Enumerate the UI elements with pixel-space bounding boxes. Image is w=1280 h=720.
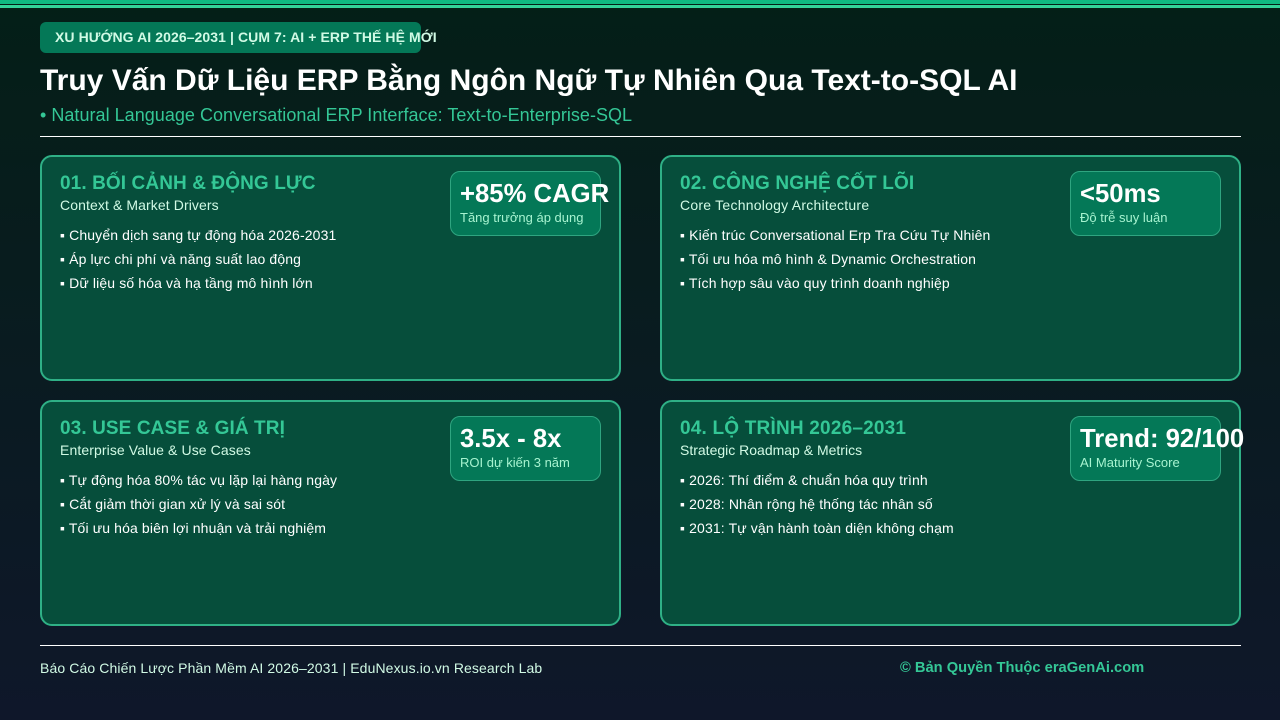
stat box: growth: +85% CAGR bbox=[460, 180, 609, 208]
bullet list: ▪ Cắt giảm thời gian xử lý và sai sót bbox=[60, 496, 285, 512]
panel subheading: Strategic Roadmap & Metrics bbox=[680, 442, 862, 458]
bullet list: ▪ Áp lực chi phí và năng suất lao động bbox=[60, 251, 301, 267]
stat box: latency: Độ trễ suy luận bbox=[1080, 210, 1167, 225]
bullet list: ▪ Chuyển dịch sang tự động hóa 2026-2031 bbox=[60, 227, 336, 243]
bullet list: ▪ 2028: Nhân rộng hệ thống tác nhân số bbox=[680, 496, 933, 512]
stat box: ROI: 3.5x - 8x bbox=[460, 425, 561, 453]
panel: context and market drivers bbox=[40, 155, 621, 381]
panel heading: 02. CÔNG NGHỆ CỐT LÕI bbox=[680, 173, 914, 194]
stat box: maturity score bbox=[1070, 416, 1221, 481]
panel: core technology bbox=[660, 155, 1241, 381]
bullet list: ▪ Tự động hóa 80% tác vụ lặp lại hàng ngày bbox=[60, 472, 337, 488]
bullet list: ▪ Tối ưu hóa biên lợi nhuận và trải nghiệm bbox=[60, 520, 326, 536]
panel: roadmap bbox=[660, 400, 1241, 626]
category badge: XU HƯỚNG AI 2026–2031 | CỤM 7: AI + ERP THẾ HỆ MỚI bbox=[55, 29, 437, 45]
bullet list: ▪ Kiến trúc Conversational Erp Tra Cứu Tự Nhiên bbox=[680, 227, 990, 243]
stat box: ROI bbox=[450, 416, 601, 481]
bullet list bbox=[60, 472, 337, 536]
panel subheading: Core Technology Architecture bbox=[680, 197, 869, 213]
bullet list: ▪ Tích hợp sâu vào quy trình doanh nghiệp bbox=[680, 275, 950, 291]
stat box: ROI: ROI dự kiến 3 năm bbox=[460, 455, 570, 470]
bullet list: ▪ Dữ liệu số hóa và hạ tầng mô hình lớn bbox=[60, 275, 313, 291]
stat box: latency bbox=[1070, 171, 1221, 236]
panel heading: 03. USE CASE & GIÁ TRỊ bbox=[60, 418, 285, 439]
panel heading: 01. BỐI CẢNH & ĐỘNG LỰC bbox=[60, 173, 316, 194]
bullet list bbox=[60, 227, 336, 291]
footer source: Báo Cáo Chiến Lược Phần Mềm AI 2026–2031 | EduNexus.io.vn Research Lab bbox=[40, 660, 542, 676]
bullet list: ▪ 2026: Thí điểm & chuẩn hóa quy trình bbox=[680, 472, 928, 488]
stat box: latency: <50ms bbox=[1080, 180, 1161, 208]
stat box: maturity score: AI Maturity Score bbox=[1080, 455, 1180, 470]
panel subheading: Context & Market Drivers bbox=[60, 197, 219, 213]
footer copyright: © Bản Quyền Thuộc eraGenAi.com bbox=[900, 660, 1144, 676]
stat box: maturity score: Trend: 92/100 bbox=[1080, 425, 1244, 453]
panel subheading: Enterprise Value & Use Cases bbox=[60, 442, 251, 458]
stat box: growth bbox=[450, 171, 601, 236]
bullet list: ▪ 2031: Tự vận hành toàn diện không chạm bbox=[680, 520, 954, 536]
stat box: growth: Tăng trưởng áp dụng bbox=[460, 210, 583, 225]
bullet list bbox=[680, 472, 954, 536]
bullet list: ▪ Tối ưu hóa mô hình & Dynamic Orchestration bbox=[680, 251, 976, 267]
title: Truy Vấn Dữ Liệu ERP Bằng Ngôn Ngữ Tự Nhiên Qua Text-to-SQL AI bbox=[40, 64, 1017, 97]
panel: use cases and value bbox=[40, 400, 621, 626]
bullet list bbox=[680, 227, 990, 291]
subtitle: • Natural Language Conversational ERP Interface: Text-to-Enterprise-SQL bbox=[40, 105, 632, 125]
panel heading: 04. LỘ TRÌNH 2026–2031 bbox=[680, 418, 906, 439]
category badge bbox=[40, 22, 421, 53]
